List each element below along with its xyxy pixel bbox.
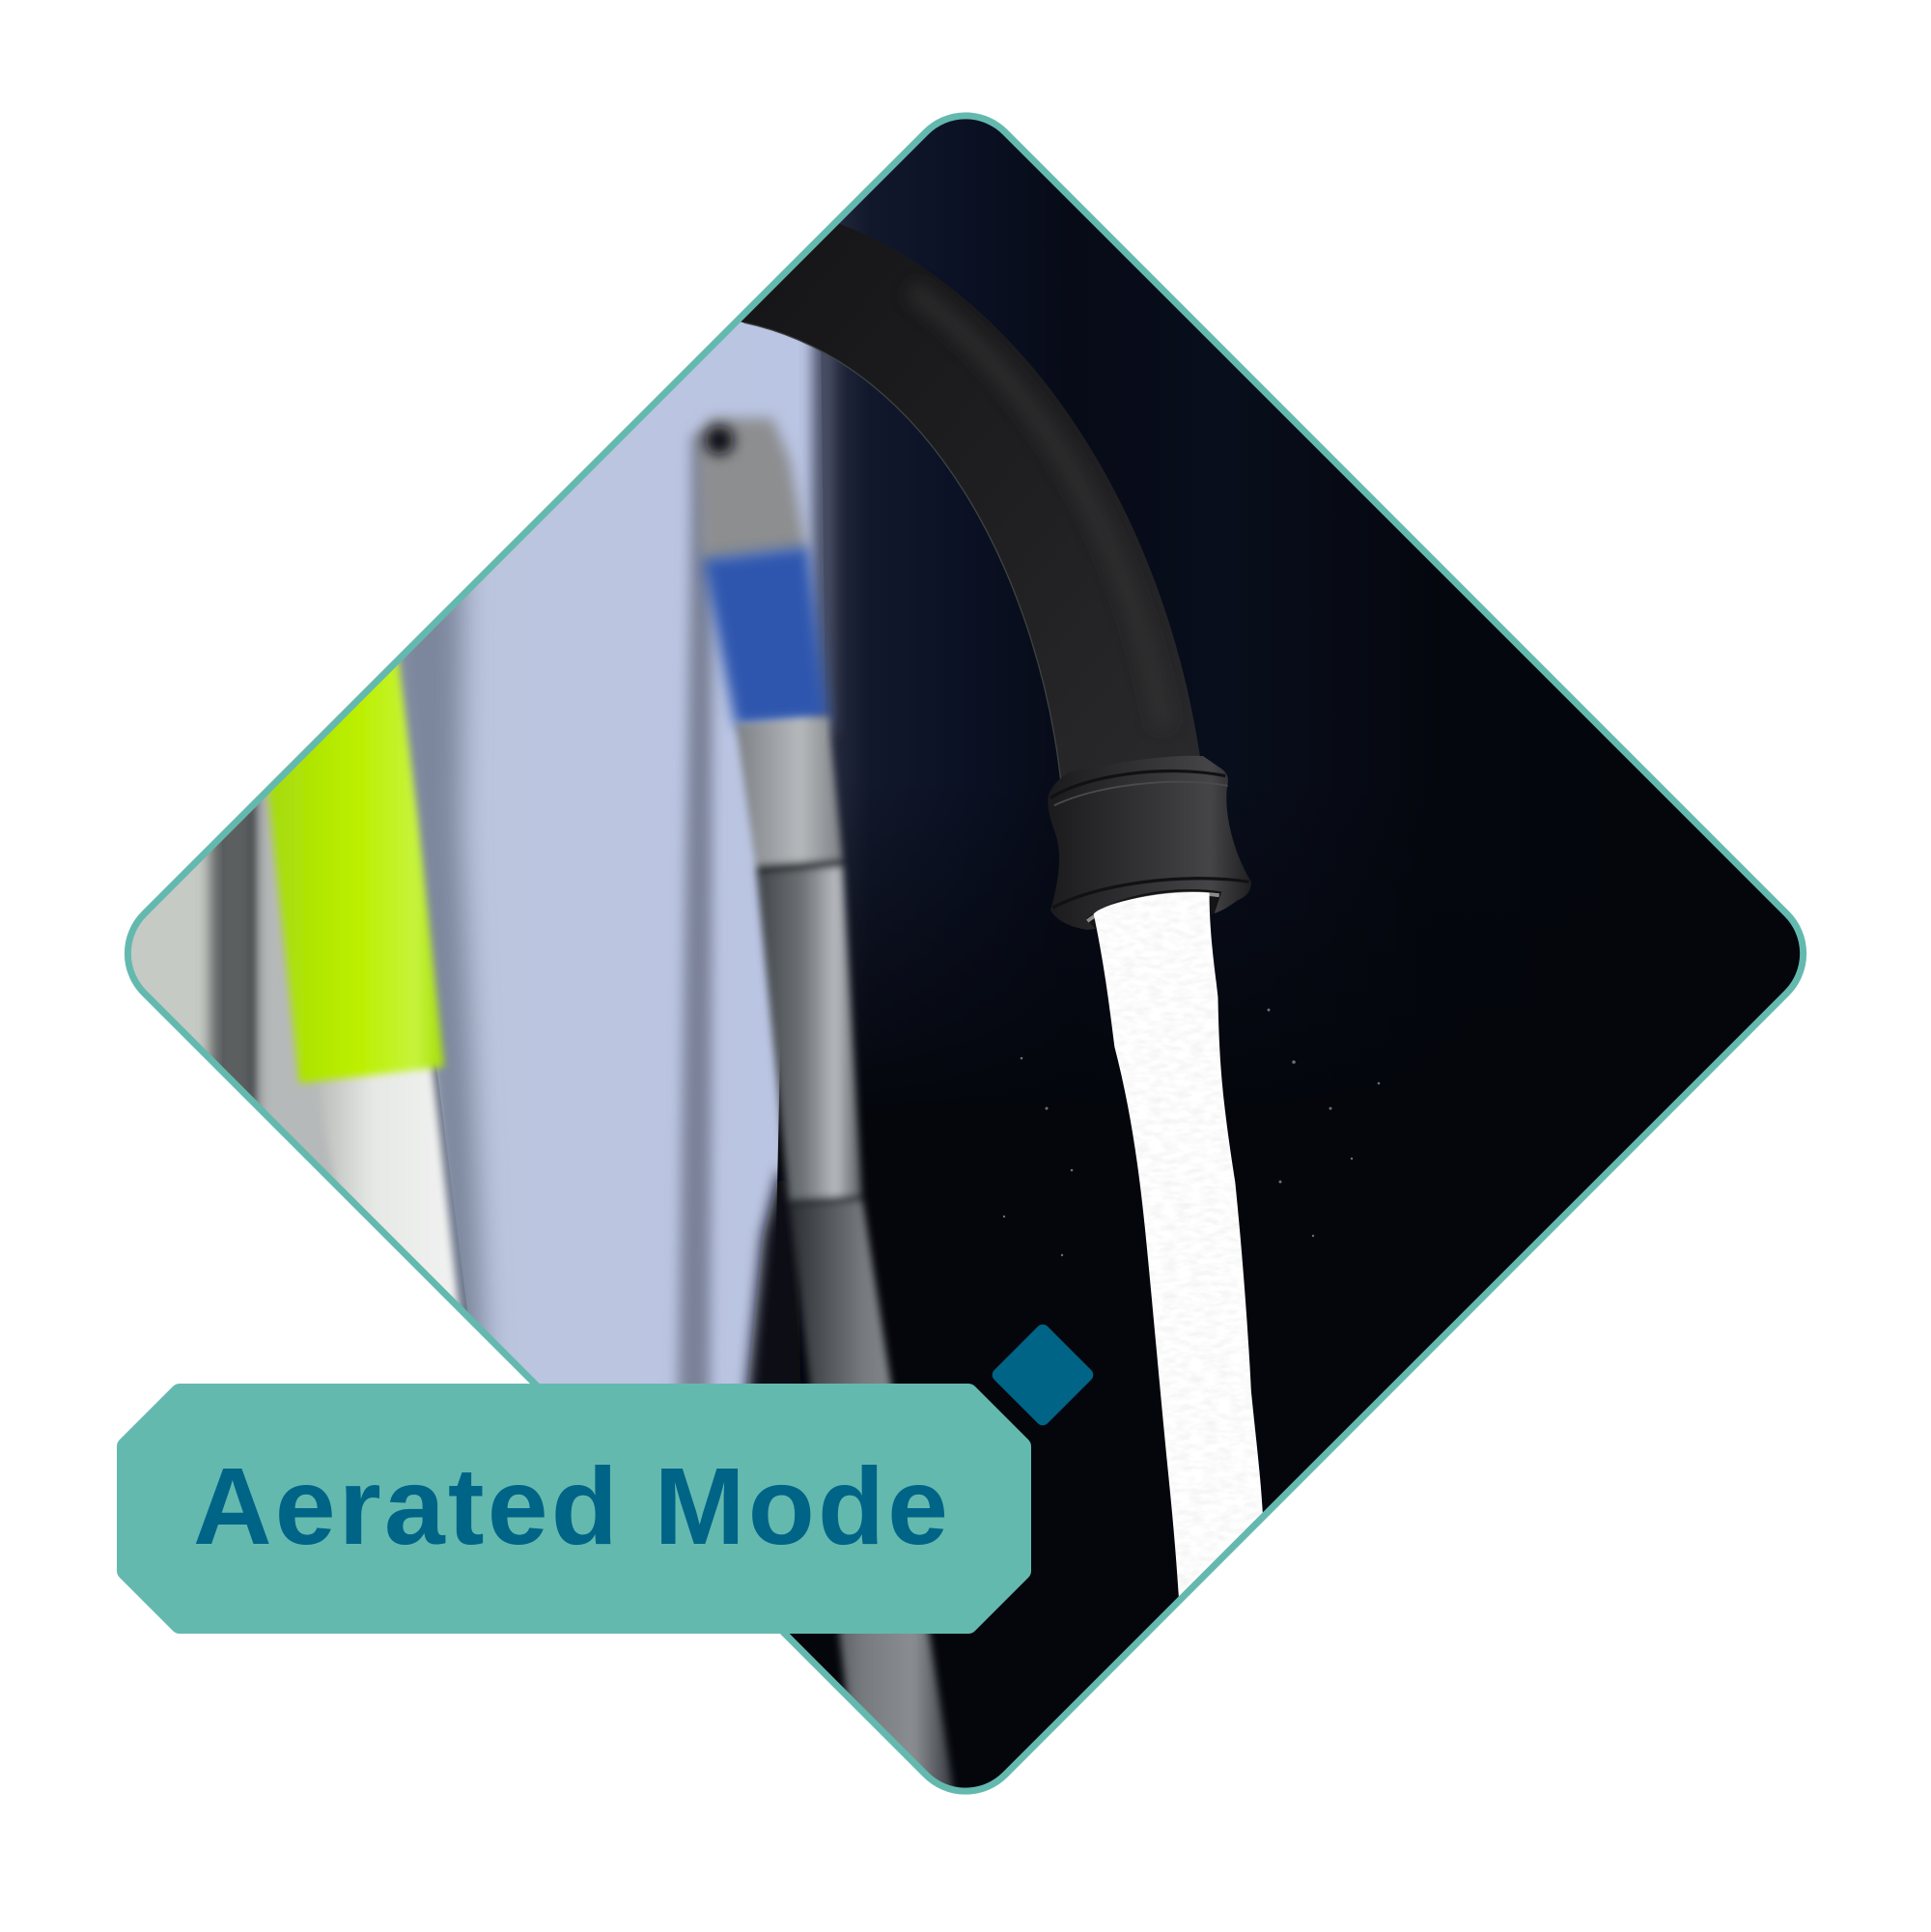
dark backdrop (245, 804, 821, 1665)
grey pen shaft (736, 716, 956, 1806)
navy fabric tone (827, 120, 1357, 1041)
label: Aerated Mode (117, 1384, 1031, 1634)
faucet collar (1048, 756, 1251, 930)
faucet spout arm (720, 210, 1202, 788)
arm inner rim (743, 322, 1061, 788)
collar ridge (1050, 771, 1225, 798)
neon green handle (256, 618, 444, 1083)
aerator opening (1086, 889, 1221, 930)
dark strip left of the lower pen (745, 1168, 801, 1410)
cloth edge softening (813, 309, 834, 734)
white pole (323, 1063, 463, 1307)
water spray specks (1003, 1008, 1380, 1256)
slate shadow band on the cloth (386, 560, 487, 1390)
pen rings (757, 863, 843, 869)
label plate (117, 1384, 1031, 1634)
small blue diamond accent (990, 1322, 1096, 1428)
pen top cap (698, 418, 807, 565)
label text: Aerated Mode (193, 1445, 948, 1567)
pen shadow line (678, 434, 713, 1410)
water stream (1094, 892, 1264, 1613)
infographic canvas (117, 112, 1807, 1795)
left grey background (131, 790, 342, 1186)
arm highlight (911, 288, 1116, 564)
blue pen band (703, 546, 828, 726)
fade to black toward the bottom (821, 842, 1357, 1788)
collar lower rim (1053, 879, 1248, 908)
diamond frame outline (104, 93, 1827, 1814)
lavender cloth (395, 322, 825, 1384)
